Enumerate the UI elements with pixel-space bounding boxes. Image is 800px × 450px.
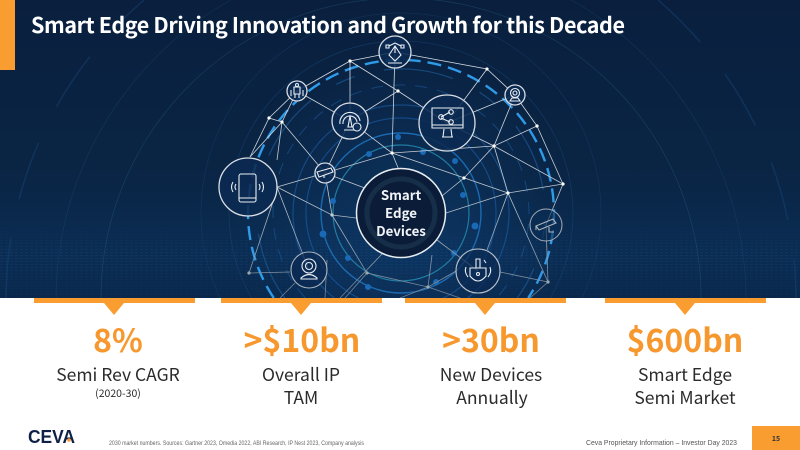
stat: >$10bn Overall IP TAM: TAM <box>284 385 318 410</box>
icon: thermometer lock <box>456 249 500 293</box>
stat: 8% Semi Rev CAGR <box>34 298 195 401</box>
icon: webcam top right <box>505 85 525 105</box>
hero background <box>0 0 800 300</box>
center circle: Smart Edge Devices: Devices <box>376 221 426 240</box>
icon: webcam bottom <box>291 252 327 288</box>
logo: CEVA: CEVA <box>28 427 75 447</box>
page number <box>752 426 800 450</box>
stat: 8% Semi Rev CAGR: (2020-30) <box>95 386 141 401</box>
stat: >30bn New Devices Annually: New Devices <box>440 362 542 387</box>
page number: 15 <box>772 434 780 444</box>
stat: $600bn Smart Edge Semi Market: $600bn <box>627 316 743 362</box>
stat: >30bn New Devices Annually: >30bn <box>442 316 540 362</box>
icon: robot <box>287 81 307 101</box>
icon: cctv right <box>530 209 562 241</box>
stat: >$10bn Overall IP TAM <box>221 298 382 410</box>
center circle: Smart Edge Devices: Smart <box>381 185 422 204</box>
center circle: Smart Edge Devices: Edge <box>385 203 417 222</box>
stat: >$10bn Overall IP TAM: >$10bn <box>244 316 360 362</box>
stat: >30bn New Devices Annually: Annually <box>456 385 528 410</box>
network lines <box>249 52 563 298</box>
icon: smartphone <box>219 158 277 216</box>
stat: $600bn Smart Edge Semi Market <box>605 298 766 410</box>
stat: 8% Semi Rev CAGR: Semi Rev CAGR <box>56 362 180 387</box>
stat: 8% Semi Rev CAGR: 8% <box>93 316 143 362</box>
panel: white stats area <box>0 298 800 450</box>
center circle: Smart Edge Devices <box>356 168 446 258</box>
icon: pen tool <box>379 36 411 68</box>
icon: small cctv <box>315 163 335 183</box>
icon: gauge <box>332 103 368 139</box>
network nodes <box>247 59 565 289</box>
orange corner tab <box>0 0 15 70</box>
stat: $600bn Smart Edge Semi Market: Semi Market <box>634 385 736 410</box>
footer note: Ceva Proprietary Information – Investor Day 2023 <box>586 438 737 447</box>
stat: >$10bn Overall IP TAM: Overall IP <box>262 362 340 387</box>
stat: $600bn Smart Edge Semi Market: Smart Edge <box>638 362 732 387</box>
footnote: 2030 market numbers. Sources: Gartner 2023, Omedia 2022, ABI Research, IP Nest 2023, Company analysis <box>109 441 364 447</box>
title: Smart Edge Driving Innovation and Growth for this Decade <box>31 9 625 40</box>
stat: >30bn New Devices Annually <box>405 298 566 410</box>
icon: monitor with share symbol <box>419 95 475 151</box>
